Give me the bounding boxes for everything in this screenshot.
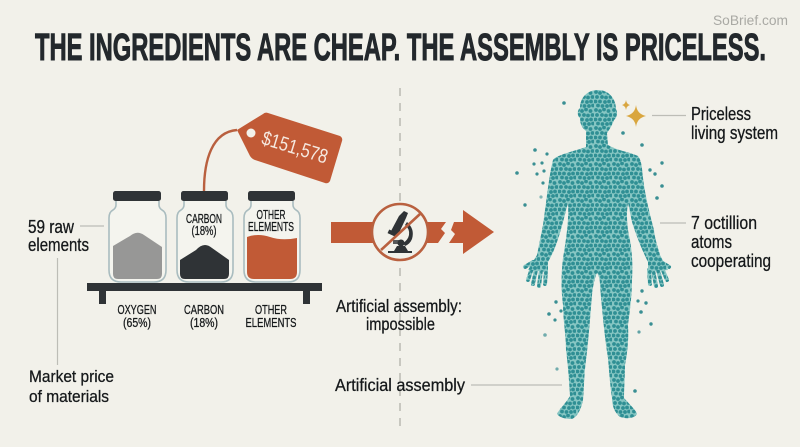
label: artificial assembly impossible: impossible: [366, 314, 435, 334]
label: 7 octillion atoms cooperating: cooperating: [691, 251, 771, 271]
shelf label: other elements: [246, 302, 297, 330]
label: artificial assembly: Artificial assembly: [335, 375, 465, 395]
jar: oxygen: [109, 191, 166, 282]
label: priceless living system: living system: [691, 123, 778, 143]
label: priceless living system: [652, 104, 778, 143]
shelf label: oxygen: [118, 302, 156, 330]
label: market price: of materials: [29, 387, 109, 406]
shelf label: carbon: (18%): [190, 315, 218, 330]
divider line: [399, 88, 401, 432]
jar: carbon: (18%): [192, 224, 216, 238]
jar: carbon: [177, 191, 233, 282]
icon: crossed-out microscope: [372, 204, 428, 260]
shelf label: other elements: ELEMENTS: [246, 315, 297, 330]
label: 59 raw elements: 59 raw: [28, 217, 75, 237]
label: 7 octillion atoms cooperating: atoms: [691, 232, 732, 252]
label: artificial assembly impossible: Artificial assembly:: [336, 296, 462, 316]
broken arrow: [331, 210, 494, 254]
label: market price: Market price: [29, 367, 114, 386]
stray atoms: [515, 101, 664, 393]
shelf label: oxygen: OXYGEN: [118, 302, 156, 317]
jar: other elements: ELEMENTS: [248, 220, 294, 234]
shelf label: other elements: OTHER: [255, 302, 287, 317]
label: 59 raw elements: elements: [28, 235, 89, 255]
jar: other elements: [244, 191, 300, 282]
label: 59 raw elements: [28, 217, 104, 365]
label: 7 octillion atoms cooperating: [660, 213, 771, 271]
price tag: $151,578: [259, 127, 330, 168]
jar: other elements: OTHER: [256, 208, 286, 222]
shelf label: carbon: [184, 302, 224, 330]
label: market price: [29, 367, 114, 406]
jar: carbon: CARBON: [186, 212, 222, 226]
label: priceless living system: Priceless: [691, 104, 751, 124]
shelf label: oxygen: (65%): [123, 315, 151, 330]
watermark: SoBrief.com: [713, 13, 788, 28]
shelf label: carbon: CARBON: [184, 302, 224, 317]
label: 7 octillion atoms cooperating: 7 octillion: [691, 213, 757, 233]
price tag: [204, 113, 342, 191]
icon: gold sparkles: [622, 100, 646, 127]
human figure of atoms: [525, 90, 669, 419]
shelf: [87, 283, 322, 304]
label: artificial assembly impossible: [336, 296, 462, 334]
